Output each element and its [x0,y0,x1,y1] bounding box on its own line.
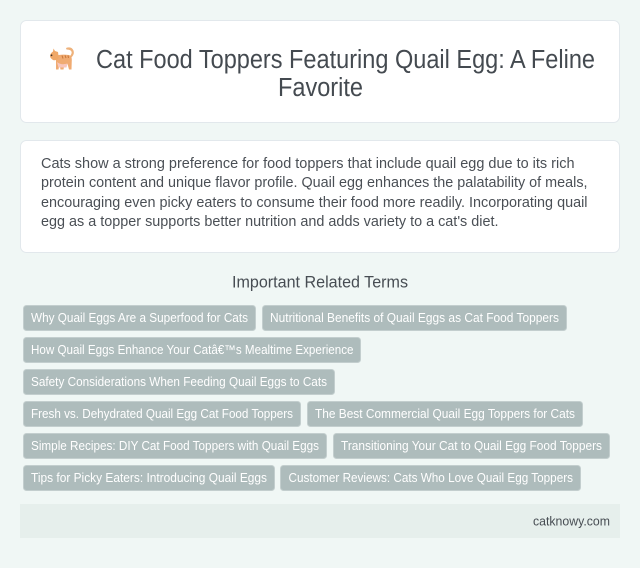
title text: Favorite [278,74,363,102]
title text [96,46,595,102]
title text: Cat Food Toppers Featuring Quail Egg: A Feline [96,46,595,74]
icon: cat [50,47,74,70]
tag [24,370,334,394]
tag [24,338,360,362]
tag: Simple Recipes: DIY Cat Food Toppers with Quail Eggs [31,439,319,453]
tag: Customer Reviews: Cats Who Love Quail Egg Toppers [288,471,573,485]
tag [24,466,274,490]
footer bar [20,504,620,538]
footer source text: catknowy.com [533,514,610,528]
tag: Transitioning Your Cat to Quail Egg Food Toppers [341,439,602,453]
tag [24,434,326,458]
tag: Tips for Picky Eaters: Introducing Quail Eggs [31,471,267,485]
tag list [24,306,610,490]
paragraph text: Cats show a strong preference for food toppers that include quail egg due to its rich [41,156,574,172]
tag [24,402,300,426]
tag: Why Quail Eggs Are a Superfood for Cats [31,311,248,325]
paragraph text [41,156,588,230]
paragraph text: encouraging even picky eaters to consume their food more readily. Incorporating quail [41,195,588,211]
tag: Fresh vs. Dehydrated Quail Egg Cat Food Toppers [31,407,293,421]
tag [280,466,580,490]
tag: Nutritional Benefits of Quail Eggs as Cat Food Toppers [270,311,559,325]
paragraph text: protein content and unique flavor profile. Quail egg enhances the palatability of meals, [41,175,588,191]
tag [334,434,610,458]
heading: related terms: Important Related Terms [232,274,408,292]
tag: The Best Commercial Quail Egg Toppers for Cats [315,407,575,421]
tag: How Quail Eggs Enhance Your Catâ€™s Mealtime Experience [31,343,354,357]
tag [262,306,566,330]
panel: summary paragraph [20,140,620,252]
panel: title card [20,20,620,122]
paragraph text: egg as a topper supports better nutrition and adds variety to a cat's diet. [41,214,498,230]
tag [24,306,256,330]
tag: Safety Considerations When Feeding Quail Eggs to Cats [31,375,327,389]
tag [308,402,582,426]
